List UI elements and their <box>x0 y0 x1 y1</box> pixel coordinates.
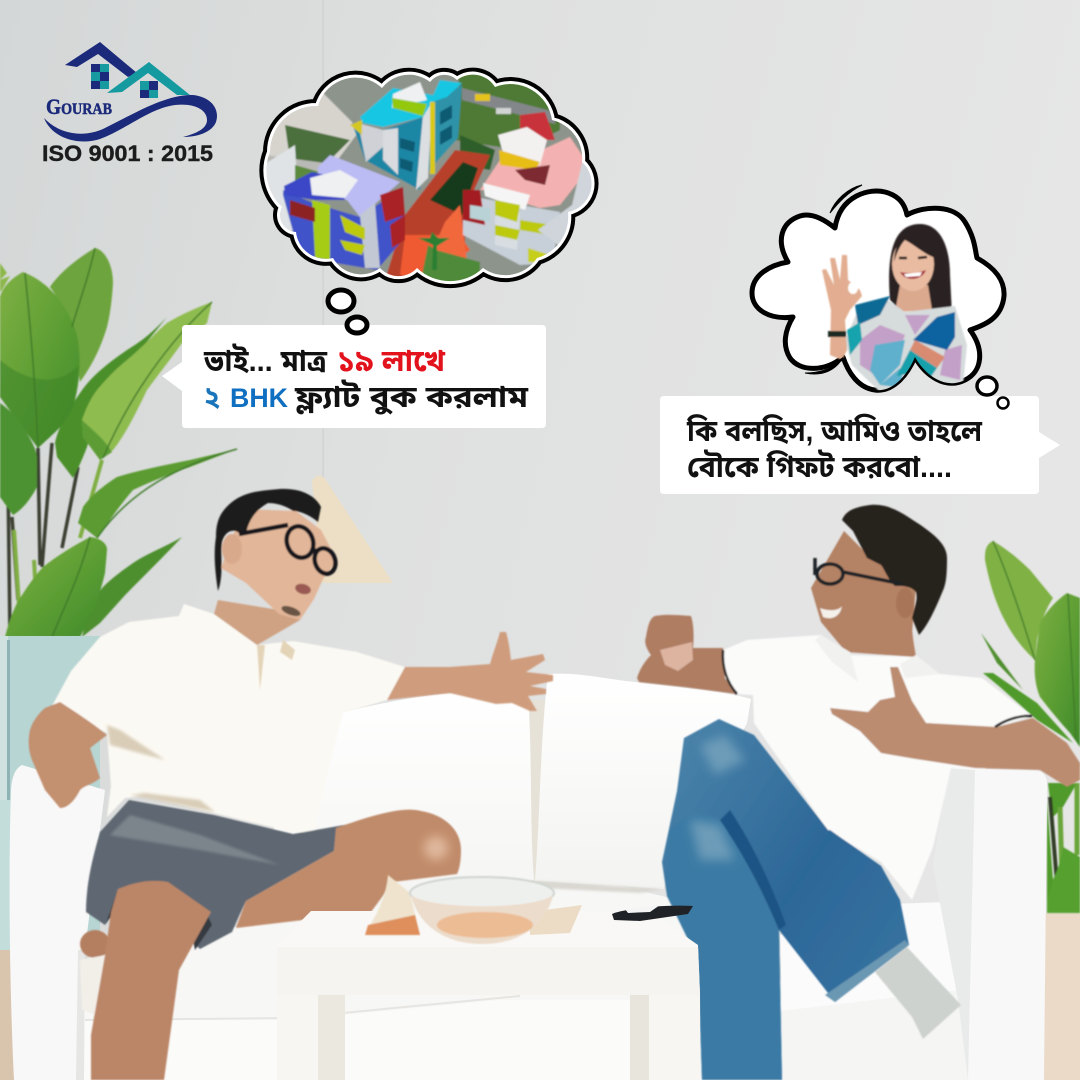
hair <box>215 489 321 591</box>
bubble text right line 2: বৌকে গিফট করবো.... <box>687 449 952 484</box>
shirt right man <box>723 635 1032 900</box>
mouth <box>820 606 842 618</box>
ear <box>896 588 914 618</box>
plant right <box>981 541 1080 913</box>
leaf mid <box>78 449 237 538</box>
bubble text left line 1 <box>203 343 446 378</box>
bubble text left line 1: ভাই... মাত্র <box>203 343 328 378</box>
neck <box>846 625 915 655</box>
armrest right <box>933 768 1047 1080</box>
sofa lower body <box>30 985 1000 1080</box>
leaf left <box>0 403 37 515</box>
bubble text left line 2: BHK <box>230 383 288 413</box>
swoosh <box>44 95 217 141</box>
hanging cord <box>323 0 324 480</box>
sofa gap <box>525 700 545 890</box>
armrest left <box>10 765 105 1080</box>
lower leaves <box>1048 783 1077 818</box>
leaf big <box>0 272 80 448</box>
wood floor <box>0 913 1080 1080</box>
leaf bottom <box>5 537 107 637</box>
window teal <box>140 81 158 98</box>
pink building <box>463 112 600 265</box>
shirt shadow <box>107 725 215 812</box>
broad leaf <box>1035 593 1080 747</box>
seat right <box>780 902 975 1011</box>
top right green and road <box>456 74 561 148</box>
hair <box>842 505 947 635</box>
sock left <box>80 955 105 1015</box>
face <box>892 237 934 291</box>
face <box>221 509 337 620</box>
back cushion right <box>535 674 751 889</box>
face <box>811 531 916 657</box>
roof teal <box>107 62 190 95</box>
bubble text left line 1: ১৯ লাখে <box>337 345 446 378</box>
cyan building <box>350 80 462 190</box>
blue building <box>283 155 405 270</box>
goatee <box>280 604 302 618</box>
wooden triangle pendant <box>312 476 393 583</box>
raised hand <box>822 255 862 360</box>
cushion shadow <box>536 881 663 893</box>
jeans back leg <box>760 830 900 930</box>
courtyard <box>385 150 490 280</box>
glasses <box>239 523 339 577</box>
phone <box>612 906 693 921</box>
bubble text right line 1: কি বলছিস, আমিও তাহলে <box>686 413 983 448</box>
snack wrapper <box>365 875 420 935</box>
teal sofa <box>0 636 100 950</box>
thought cloud with woman <box>752 185 1004 392</box>
left backdrop <box>267 94 358 163</box>
thought dot small <box>347 317 367 333</box>
logo <box>42 42 217 166</box>
leaf long <box>82 302 212 460</box>
arm right with hand <box>387 632 553 711</box>
mouth <box>294 582 312 596</box>
seat seam <box>85 996 520 1020</box>
man left <box>29 489 553 1080</box>
arm left with hand <box>29 702 107 808</box>
man right <box>637 505 1080 1080</box>
jeans front <box>662 719 909 1080</box>
sleeve hem left <box>723 650 737 694</box>
thought dot woman large <box>977 377 997 395</box>
left arm holding snack <box>637 615 737 694</box>
thought cloud with buildings <box>250 60 610 290</box>
collar <box>815 635 940 682</box>
building illustration <box>266 74 592 282</box>
ear <box>222 534 242 564</box>
lower leg <box>91 881 211 1080</box>
sleeve hem right <box>995 716 1032 727</box>
glass bowl <box>410 877 554 944</box>
roof navy <box>65 42 137 77</box>
speech bubble left <box>162 325 546 428</box>
neck <box>214 600 300 645</box>
palm garden <box>420 245 480 285</box>
shirt left man <box>52 604 405 832</box>
body saree <box>845 298 967 392</box>
plant left <box>0 248 237 637</box>
white sofa <box>10 674 1047 1080</box>
back cushion left <box>240 693 534 930</box>
windows <box>400 105 452 172</box>
leaf top <box>50 248 113 382</box>
window navy <box>91 64 109 89</box>
leaf low thin <box>82 537 182 637</box>
seat left <box>85 885 800 1020</box>
hair <box>889 224 952 315</box>
coffee table <box>277 911 700 1080</box>
thigh <box>236 810 461 928</box>
speech bubble right <box>660 396 1060 494</box>
sock <box>875 947 961 1039</box>
phone screen <box>625 905 660 913</box>
glasses <box>815 558 902 584</box>
thought dot woman small <box>998 398 1008 408</box>
shorts <box>86 800 361 949</box>
back foot <box>80 930 110 958</box>
thought dot large <box>328 290 354 312</box>
upper leaf <box>985 541 1053 660</box>
thin leaf <box>981 633 1023 690</box>
wrapper right <box>530 905 582 935</box>
bubble text left line 2 <box>204 379 528 415</box>
bubble text left line 2: ২ <box>204 381 220 414</box>
arm with hand <box>830 667 1080 787</box>
bubble text left line 2: ফ্ল্যাট বুক করলাম <box>294 379 528 415</box>
brand name: GOURAB <box>46 94 112 119</box>
neck <box>895 285 932 312</box>
ISO label: ISO 9001 : 2015 <box>42 141 213 166</box>
leaf behind <box>55 317 167 478</box>
